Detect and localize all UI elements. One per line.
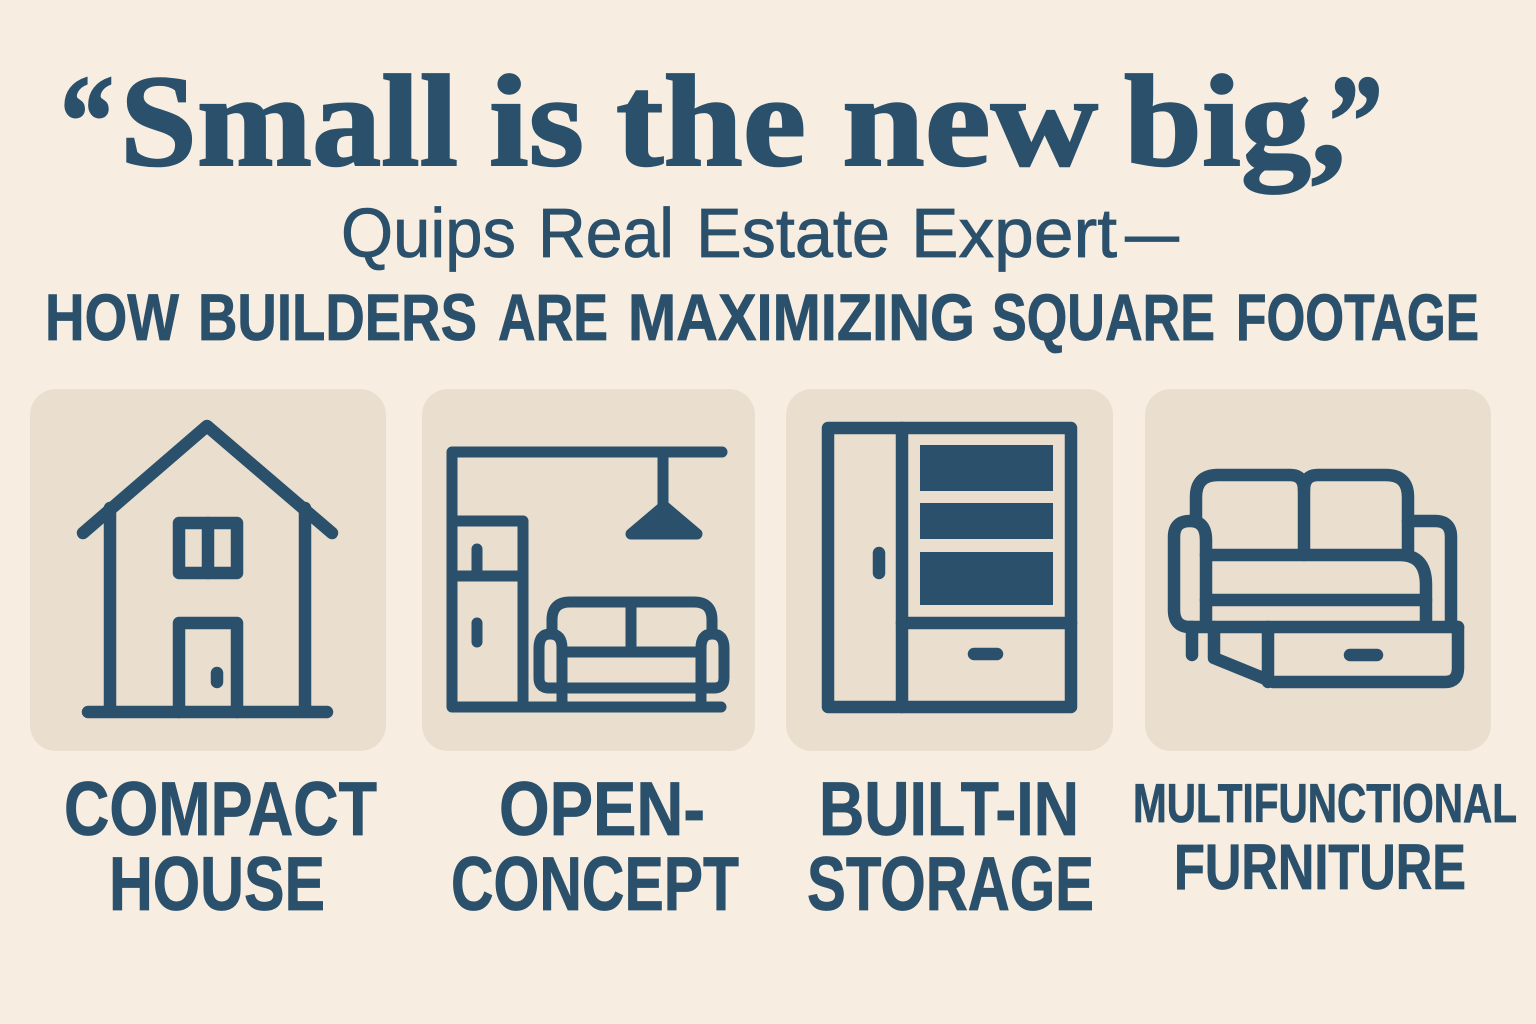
title: [60, 49, 1383, 194]
heading: HOW: [45, 280, 180, 354]
subtitle: Expert: [911, 194, 1117, 272]
title: ”: [1329, 49, 1383, 194]
subtitle: [341, 194, 1179, 272]
label: open-concept: OPEN-: [499, 767, 705, 852]
title: the: [616, 49, 806, 194]
label: compact house: COMPACT: [64, 767, 377, 852]
label: compact house: HOUSE: [109, 842, 325, 927]
heading: MAXIMIZING: [628, 280, 975, 354]
subtitle: —: [1125, 194, 1179, 272]
label: built-in storage: [807, 767, 1094, 927]
icon: shelves: [920, 445, 1053, 605]
panel: compact house: [30, 389, 386, 751]
label: multifunctional furniture: [1133, 772, 1517, 903]
heading: BUILDERS: [198, 280, 477, 354]
icon: sofa bed: [1174, 475, 1458, 682]
icon: open-concept room: [452, 452, 724, 707]
label: open-concept: CONCEPT: [451, 842, 739, 927]
title: “: [60, 49, 114, 194]
label: built-in storage: STORAGE: [807, 842, 1094, 927]
icon: storage cabinet: [828, 428, 1071, 707]
panel: open-concept: [422, 389, 755, 751]
heading: ARE: [498, 280, 608, 354]
title: new: [842, 49, 1098, 194]
panel: built-in storage: [786, 389, 1113, 751]
label: open-concept: [451, 767, 739, 927]
subtitle: Quips: [341, 194, 516, 272]
heading: SQUARE: [992, 280, 1215, 354]
label: compact house: [64, 767, 377, 927]
icon: house: [83, 426, 332, 712]
title: is: [489, 49, 584, 194]
subtitle: Real: [538, 194, 674, 272]
label: built-in storage: BUILT-IN: [819, 767, 1079, 852]
heading: [45, 280, 1479, 354]
subtitle: Estate: [696, 194, 890, 272]
label: multifunctional furniture: FURNITURE: [1174, 831, 1466, 903]
panel: multifunctional furniture: [1145, 389, 1491, 751]
title: big,: [1124, 49, 1346, 194]
title: Small: [120, 49, 458, 194]
